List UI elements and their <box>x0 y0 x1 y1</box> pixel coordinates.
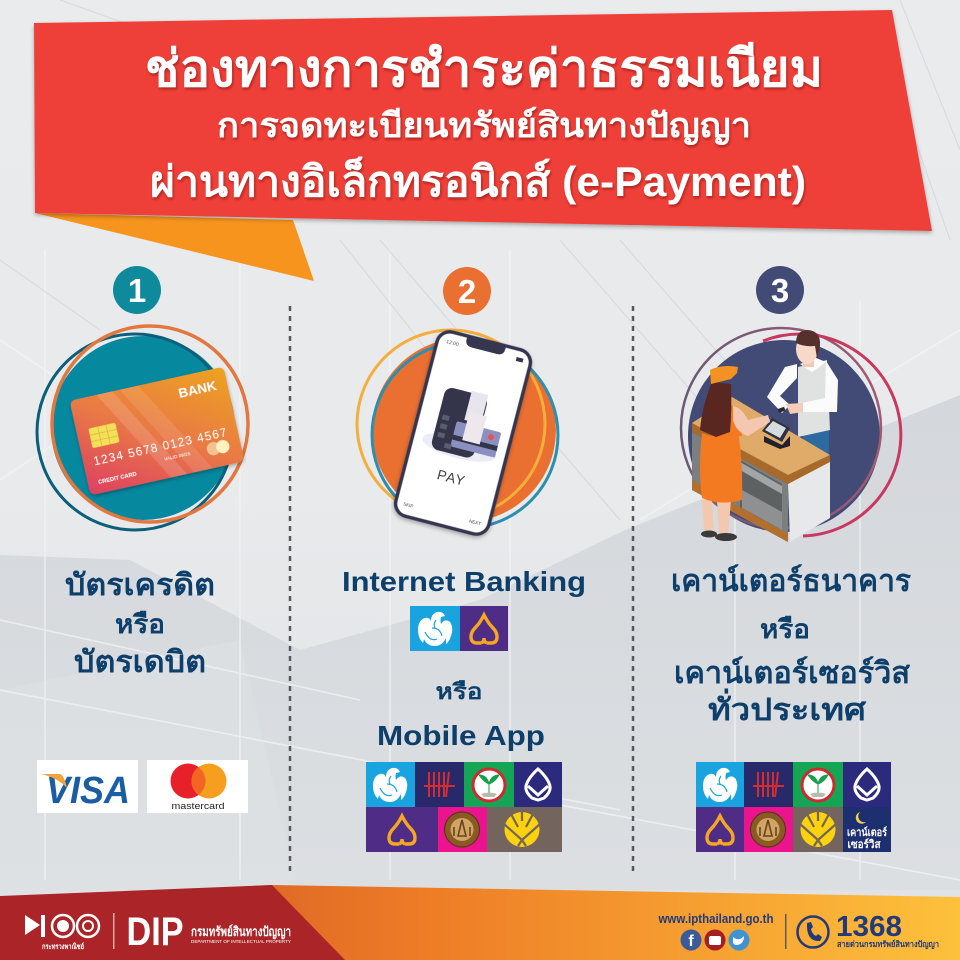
logo: DIP: กรมทรัพย์สินทางปัญญา <box>191 924 291 940</box>
icon: credit card in circle: 1234 5678 0123 4567 <box>92 425 228 468</box>
caption: mobile app: Mobile App <box>377 720 545 751</box>
logo: BAAC <box>438 807 487 852</box>
caption: credit card: บัตรเครดิต <box>65 569 215 602</box>
column dividers <box>290 306 633 876</box>
number badge 3: 3 <box>771 272 789 309</box>
footer <box>0 885 960 960</box>
logo: mastercard <box>147 760 248 813</box>
icon: bank counter illustration <box>681 328 901 542</box>
icon: smartphone pay in circle <box>357 329 558 537</box>
caption: credit card: บัตรเดบิต <box>74 646 206 679</box>
caption: bank and service counters: เคาน์เตอร์เซอร์วิส <box>674 656 911 690</box>
icon: smartphone pay in circle: SKIP <box>403 501 414 509</box>
icon: credit card in circle: VALID 09/25 <box>164 451 191 462</box>
website and social icons: www.ipthailand.go.th <box>658 911 774 926</box>
logo: KTB <box>696 762 744 807</box>
title line 3: ผ่านทางอิเล็กทรอนิกส์ (e-Payment) <box>150 156 806 205</box>
logo: visa: VISA <box>46 770 130 812</box>
icon: smartphone pay in circle: PAY <box>435 466 467 489</box>
orange banner tail <box>35 213 314 281</box>
icon: smartphone pay in circle: NEXT <box>469 518 482 526</box>
logo: MOC: กระทรวงพาณิชย์ <box>42 942 84 951</box>
number badge 3 <box>756 266 804 314</box>
icon: smartphone pay in circle: 12:00 <box>446 339 459 348</box>
logo: DIP: DEPARTMENT OF INTELLECTUAL PROPERTY <box>191 939 291 944</box>
caption: internet banking: Internet Banking <box>342 566 586 597</box>
caption: credit card: หรือ <box>115 609 165 639</box>
logo: GSB <box>744 762 793 807</box>
website and social icons <box>658 911 774 950</box>
hotline 1368: 1368 <box>836 911 902 943</box>
caption: bank and service counters: หรือ <box>760 614 810 644</box>
logo: Krungsri wide <box>487 807 562 852</box>
logo: mastercard: mastercard <box>172 801 224 811</box>
icon: credit card in circle <box>37 326 248 530</box>
website and social icons: f <box>688 933 694 950</box>
logo: KBank <box>464 762 514 807</box>
bank logos: mobile app <box>366 762 562 852</box>
logo: SCB <box>696 807 744 852</box>
title line 1: ช่องทางการชำระค่าธรรมเนียม <box>145 40 823 97</box>
number badge 2 <box>443 267 491 315</box>
caption: or: หรือ <box>436 679 482 704</box>
logo: Counter Service: เคาน์เตอร์ <box>847 826 887 839</box>
caption: credit card <box>65 569 215 679</box>
logo: KBank <box>793 762 843 807</box>
title line 2: การจดทะเบียนทรัพย์สินทางปัญญา <box>217 106 751 146</box>
title banner <box>34 10 932 231</box>
logo: visa <box>37 760 138 813</box>
logo: DIP <box>126 910 291 954</box>
logo: BBL <box>843 762 891 807</box>
logo: MOC <box>25 915 99 951</box>
icon: credit card in circle: BANK <box>177 378 218 401</box>
logo: SCB wide <box>366 807 438 852</box>
logo: GSB <box>415 762 464 807</box>
caption: bank and service counters: เคาน์เตอร์ธนาคาร <box>671 564 911 598</box>
logo: KTB <box>410 606 460 651</box>
logo: BAAC <box>744 807 793 852</box>
logo: KTB <box>366 762 415 807</box>
logo: SCB <box>460 606 508 651</box>
icon: credit card in circle: CREDIT CARD <box>98 471 137 486</box>
caption: bank and service counters <box>671 564 911 727</box>
logo: Counter Service: เซอร์วิส <box>848 838 881 851</box>
number badge 1: 1 <box>128 272 146 309</box>
hotline 1368 <box>798 911 939 950</box>
hotline 1368: สายด่วนกรมทรัพย์สินทางปัญญา <box>837 939 939 950</box>
logo: BBL <box>514 762 562 807</box>
counter <box>692 432 788 542</box>
bank logos: internet banking <box>410 606 508 651</box>
logo: Counter Service <box>843 807 891 852</box>
number badge 1 <box>113 266 161 314</box>
bank logos: counter service <box>696 762 891 852</box>
caption: bank and service counters: ทั่วประเทศ <box>708 688 867 727</box>
number badge 2: 2 <box>458 273 476 310</box>
POS terminal <box>762 418 790 449</box>
logo: Krungsri <box>793 807 843 852</box>
woman <box>700 366 770 541</box>
logo: DIP: DIP <box>126 910 184 954</box>
man <box>767 330 838 454</box>
